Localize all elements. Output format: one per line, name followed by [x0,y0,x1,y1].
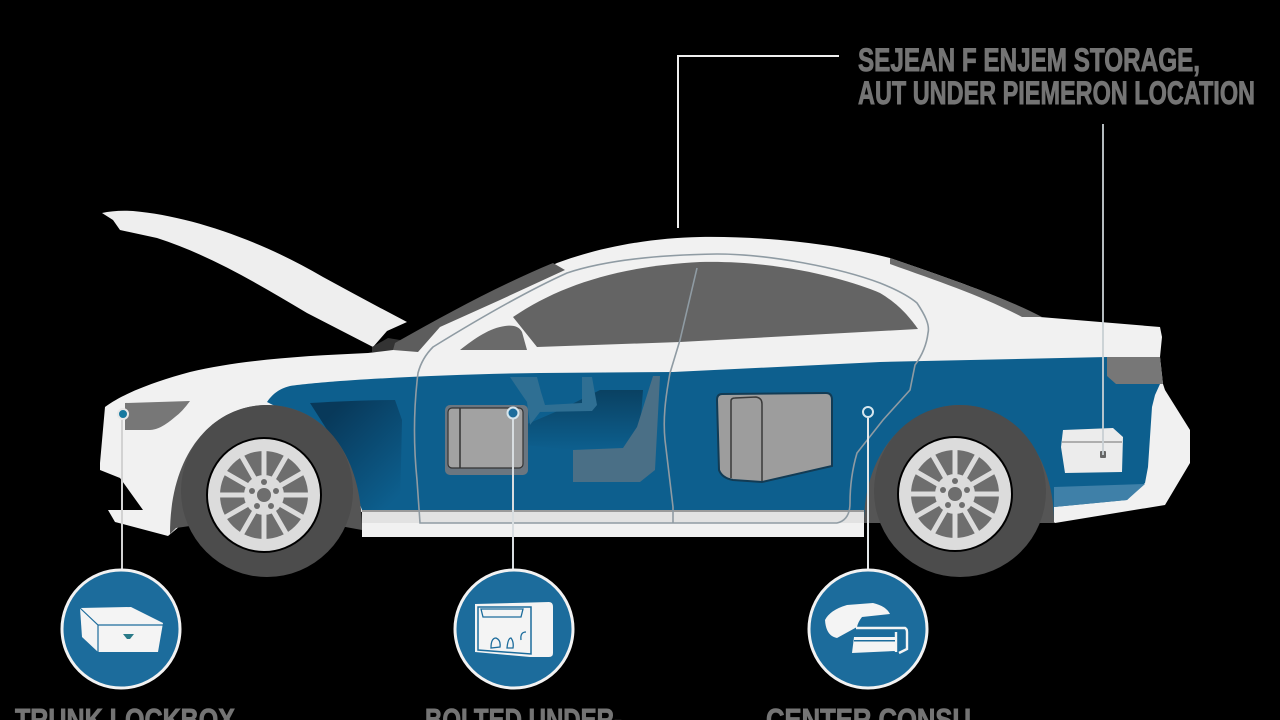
icon badge: trunk lockbox [62,570,180,688]
leader line: bolted under-seat [512,418,514,570]
leader line: trunk box [1102,124,1104,455]
lower rear strip [1054,484,1145,507]
quarter window [460,326,527,350]
car body shell [100,237,1190,536]
leader line: trunk lockbox [121,420,123,570]
blue cutaway panel [267,357,1160,520]
icon badge: bolted under-seat safe [455,570,573,688]
storage box: rear [717,393,832,482]
callout heading: storage location [858,42,1255,111]
marker dot: bolted under-seat [508,408,518,418]
hinge [372,338,400,352]
rear glass strip [890,258,1042,317]
sill [362,523,864,537]
trunk box [1061,428,1123,473]
car illustration [100,211,1190,577]
marker dot: trunk lockbox [118,409,128,419]
windshield strip [393,263,565,352]
marker dot: center console [863,407,873,417]
taillight [1107,357,1163,384]
interior seats [510,376,660,482]
leader line: center console [867,418,869,570]
raised hood [102,211,407,347]
side window [513,262,918,347]
storage box: front [445,405,528,475]
rocker strip [362,510,864,523]
leader line: roof callout [678,56,839,228]
rear wheel [864,405,1054,577]
arch shadow [310,400,402,510]
front wheel [170,405,362,577]
door seam lines [414,254,928,523]
icon badge: center console [809,570,927,688]
headlight [125,401,190,430]
